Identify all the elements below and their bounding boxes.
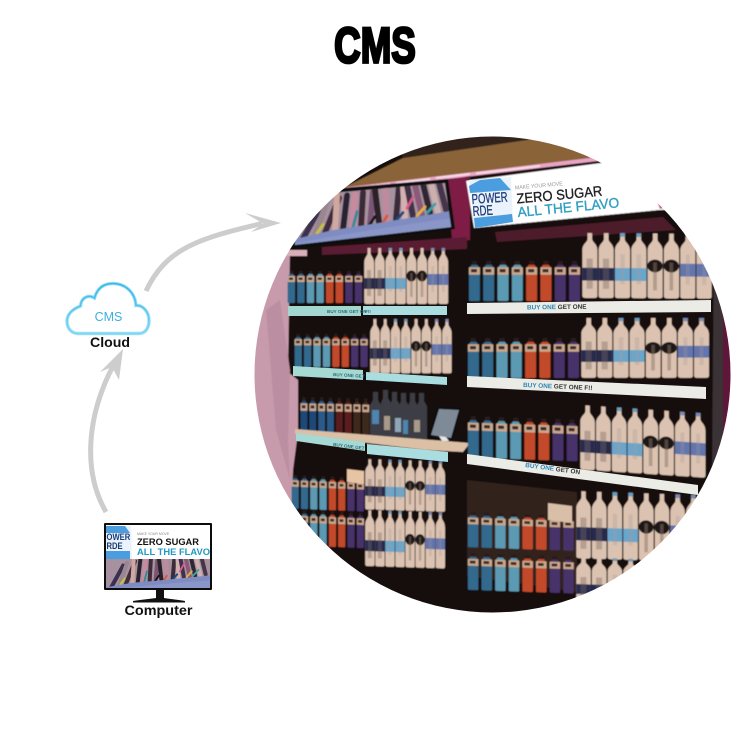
- title: CMS: [334, 18, 416, 74]
- right shelf labels: [467, 300, 711, 495]
- sign text: MAKE YOUR MOVE: [515, 181, 563, 191]
- monitor stand: [133, 590, 185, 602]
- right side pillar: [711, 286, 730, 468]
- monitor sign text: ALL THE FLAVO: [137, 547, 210, 557]
- left column bottle rows: [288, 248, 452, 439]
- sign: white panel: [465, 162, 665, 229]
- icon: computer monitor: [104, 523, 215, 602]
- left shelf labels: BUY ONE GET: [333, 442, 365, 451]
- monitor crowd image: [106, 559, 210, 588]
- tablet: [428, 407, 461, 442]
- left shelf labels: [288, 306, 448, 462]
- icon: cloud: [67, 284, 149, 334]
- right shelf labels: BUY ONE GET ON: [525, 462, 581, 476]
- monitor logo: OWER: [106, 531, 130, 542]
- maroon bar: [322, 237, 467, 255]
- arrow: cloud to display: [146, 213, 281, 291]
- right maroon bar: [495, 217, 676, 242]
- right column bottle rows: [468, 233, 712, 478]
- monitor sign text: [137, 532, 210, 557]
- digital shelf labels: [288, 300, 711, 495]
- sign logo: RDE: [472, 202, 493, 219]
- left shelf labels: F!!: [365, 309, 371, 314]
- pale shelf: [295, 429, 470, 452]
- monitor sign text: MAKE YOUR MOVE: [137, 532, 170, 536]
- monitor logo: RDE: [106, 540, 123, 551]
- sign logo: [469, 177, 513, 228]
- right lower cabinet: [466, 480, 697, 598]
- lower left cabinet bottles: [292, 459, 445, 569]
- left shelf labels: BUY ONE GET: [333, 372, 365, 379]
- circular photo: retail shelf display: [250, 130, 754, 620]
- label: Computer: Computer: [124, 603, 193, 618]
- label: Cloud: Cloud: [90, 335, 130, 350]
- cloud label: CMS: CMS: [95, 310, 122, 324]
- top video banner: [291, 178, 456, 249]
- sign text: ALL THE FLAVO: [517, 194, 620, 220]
- shelf backdrop: [287, 139, 714, 612]
- left shelf labels: BUY ONE GET ON: [327, 309, 367, 314]
- right shelf labels: BUY ONE GET ONE: [527, 304, 587, 311]
- monitor logo: [106, 526, 132, 559]
- sign text: ZERO SUGAR: [516, 183, 603, 206]
- right shelf labels: BUY ONE GET ONE F!!: [523, 382, 593, 392]
- clear water bottles: [370, 390, 427, 442]
- maroon wall: [447, 176, 470, 240]
- arrow: computer to cloud: [91, 349, 123, 512]
- pink wall: [254, 254, 299, 503]
- ceiling: [344, 136, 599, 189]
- monitor sign text: ZERO SUGAR: [137, 537, 200, 547]
- sign text: [515, 181, 620, 220]
- sign logo: POWER: [471, 189, 508, 207]
